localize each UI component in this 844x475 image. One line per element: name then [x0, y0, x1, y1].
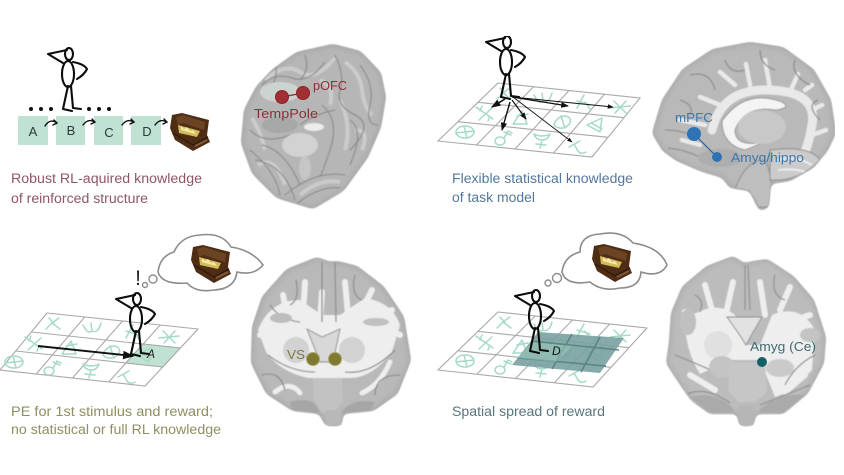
- label Amyg (Ce): Amyg (Ce): [750, 339, 816, 354]
- panel: brain ventral view: [242, 45, 385, 208]
- panel: spatial spread grid: [438, 233, 667, 419]
- brain surface: [242, 45, 385, 208]
- caption: spatial spread: Spatial spread of reward: [452, 404, 605, 419]
- panel: statistical knowledge grid: [438, 36, 640, 205]
- stick figure: [515, 290, 554, 353]
- stick figure: [486, 36, 525, 99]
- stimulus grid: [438, 312, 647, 387]
- highlighted reward cell: [126, 344, 180, 367]
- label mPFC: mPFC: [675, 110, 713, 125]
- region markers VS: [306, 352, 342, 366]
- stimulus boxes A to D: A: [29, 124, 38, 139]
- caption: flexible knowledge: Flexible statistical knowledge: [452, 171, 633, 186]
- caption: flexible knowledge: of task model: [452, 190, 535, 205]
- region marker amygdala: [757, 357, 767, 367]
- stimulus label D: D: [552, 344, 561, 358]
- stimulus boxes A to D: [18, 116, 161, 145]
- label VS: VS: [287, 347, 305, 362]
- exclamation mark: !: [135, 267, 141, 290]
- caption: robust knowledge: Robust RL-aquired knowledge: [11, 171, 202, 186]
- stimulus glyphs: [5, 318, 179, 383]
- panel: prediction error grid: [0, 234, 263, 437]
- label TempPole: TempPole: [254, 106, 318, 121]
- stick figure: [116, 293, 155, 356]
- panel: RL knowledge chain: [11, 48, 210, 206]
- thought bubble with chest: [545, 233, 667, 289]
- stimulus boxes A to D: C: [104, 125, 114, 140]
- caption: prediction error: no statistical or full RL knowledge: [11, 422, 221, 437]
- stimulus grid: [0, 313, 198, 386]
- region markers pOFC and TempPole: [276, 86, 310, 104]
- icon: treasure chest: [170, 113, 210, 151]
- brain slice: [653, 43, 835, 210]
- prediction error arrow: [38, 346, 133, 356]
- stimulus grid: [438, 83, 640, 157]
- region markers mPFC and Amyg/hippo: [687, 127, 722, 162]
- transition arrows: [45, 119, 167, 126]
- caption: prediction error: PE for 1st stimulus and reward;: [11, 404, 213, 419]
- thought bubble with chest: [142, 234, 263, 291]
- panel: brain coronal view VS: [252, 258, 410, 426]
- stimulus glyphs: [456, 88, 630, 153]
- brain slice: [252, 258, 410, 426]
- stimulus boxes A to D: D: [142, 124, 152, 139]
- panel: brain sagittal view: [653, 43, 835, 210]
- stimulus glyphs: [456, 317, 630, 382]
- stick figure: [48, 48, 87, 111]
- transition arrows: [492, 97, 613, 142]
- stimulus label A: A: [146, 347, 155, 361]
- panel: brain coronal view amygdala: [667, 257, 825, 426]
- brain slice: [667, 257, 825, 426]
- caption: robust knowledge: of reinforced structure: [11, 191, 148, 206]
- label pOFC: pOFC: [313, 78, 347, 93]
- stimulus boxes A to D: B: [67, 123, 75, 138]
- dotted sequence: [29, 107, 111, 111]
- reward spread region: [512, 332, 624, 373]
- label Amyg/hippo: Amyg/hippo: [731, 150, 804, 165]
